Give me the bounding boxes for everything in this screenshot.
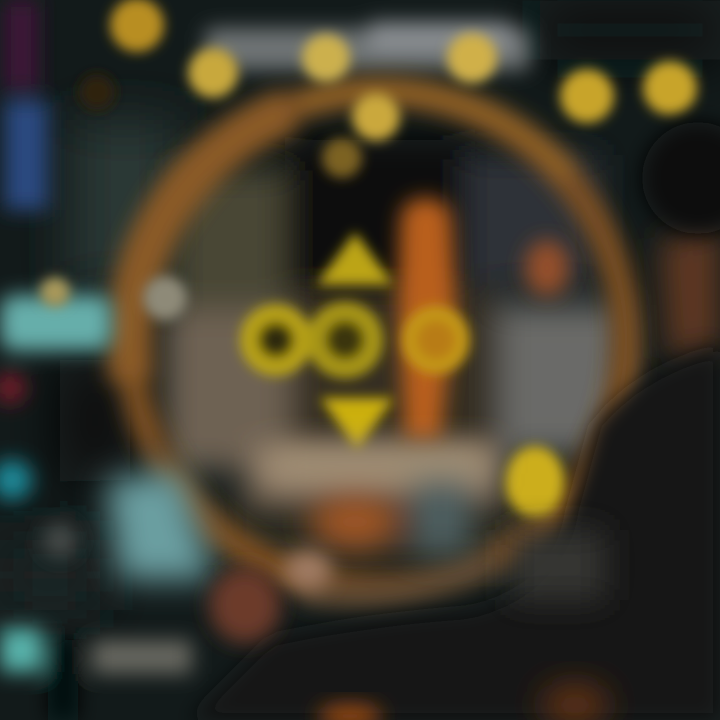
- orange figures: [398, 198, 569, 440]
- sleeve shade: [510, 530, 605, 600]
- head: [642, 122, 720, 234]
- neck: [660, 225, 720, 360]
- light 11: [143, 276, 187, 320]
- panel: ring interior backdrop: [165, 140, 625, 565]
- person silhouette: [190, 122, 720, 720]
- light 5: [560, 69, 614, 123]
- neon: blue panel: [4, 100, 48, 210]
- light 2: [188, 48, 238, 98]
- light 1: [110, 0, 164, 52]
- small orange figure: [525, 240, 569, 296]
- bottom orange glow right: [541, 683, 609, 720]
- neon: small grey light: [43, 523, 77, 557]
- light 7: [352, 93, 400, 141]
- cream band: [270, 450, 490, 476]
- left neon panels: [0, 0, 192, 720]
- finger highlight: [284, 550, 332, 590]
- orange object: [309, 494, 401, 550]
- yellow bokeh lights: [40, 0, 697, 320]
- coin right: [409, 313, 463, 367]
- neon: bottom black post: [48, 640, 78, 720]
- light 9: [79, 74, 115, 110]
- lower table objects: [105, 450, 490, 580]
- top grey banner: [205, 22, 530, 70]
- orange column: [398, 198, 456, 440]
- coin centre: [316, 311, 374, 369]
- coin left: [249, 313, 303, 367]
- neon: magenta strip: [4, 0, 38, 90]
- triangle up: [316, 232, 394, 285]
- bottom orange glow left: [318, 704, 382, 720]
- teal-grey object: [412, 470, 470, 555]
- ring: [129, 89, 626, 596]
- neon: pale panel: [92, 640, 192, 674]
- light 8: [322, 138, 362, 178]
- pale blue object: [105, 470, 215, 580]
- body: [190, 350, 720, 720]
- yellow blob: [505, 446, 565, 518]
- light 4: [447, 33, 497, 83]
- light 10: [40, 277, 70, 307]
- neon: lower teal panel: [0, 628, 42, 672]
- neon: red light: [0, 373, 25, 403]
- coin symbols: [249, 232, 565, 518]
- triangle down: [320, 398, 394, 450]
- light 6: [643, 61, 697, 115]
- neon: cyan light: [0, 460, 32, 500]
- neon: teal row: [0, 295, 112, 351]
- light 3: [302, 34, 350, 82]
- hand: [209, 567, 281, 643]
